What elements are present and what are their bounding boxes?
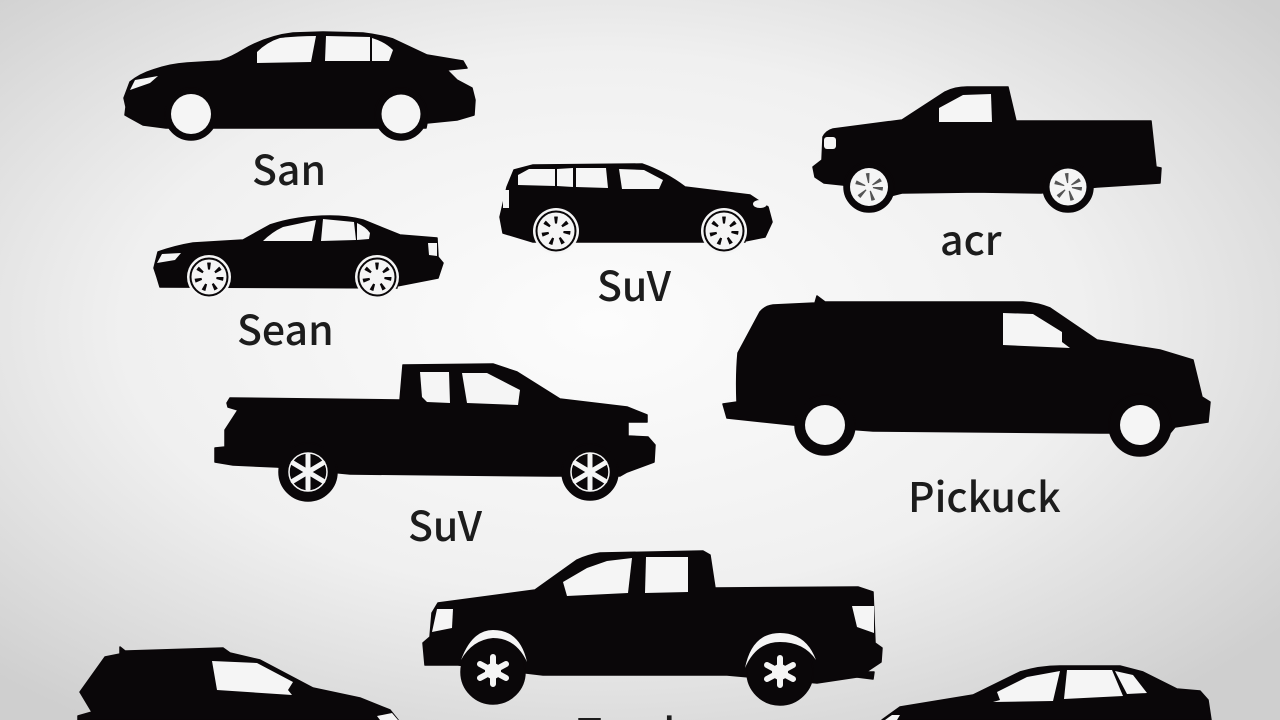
label: SuV center: SuV (408, 493, 483, 553)
wheels (289, 453, 609, 491)
wheels (187, 255, 399, 299)
wheels (461, 630, 816, 685)
vehicle: bottom-right sedan (882, 666, 1211, 720)
vehicle: small SUV wagon (500, 164, 772, 254)
vehicle: bottom pickup truck (423, 551, 882, 705)
label: Sean: Sean (237, 297, 334, 357)
vehicle: top-left sedan (124, 32, 475, 140)
vehicle: small sedan (154, 216, 443, 299)
vehicle: bottom-left hatchback (78, 647, 398, 720)
label: SuV top: SuV (597, 253, 672, 313)
label: acr: acr (940, 207, 1002, 267)
label: Pickuck: Pickuck (908, 464, 1061, 524)
wheels (850, 168, 1086, 206)
label: San: San (252, 137, 326, 197)
vehicle: top-right pickup (813, 87, 1161, 212)
vehicle: van (723, 296, 1210, 456)
vehicle: center pickup (215, 364, 655, 501)
wheels (533, 208, 747, 254)
